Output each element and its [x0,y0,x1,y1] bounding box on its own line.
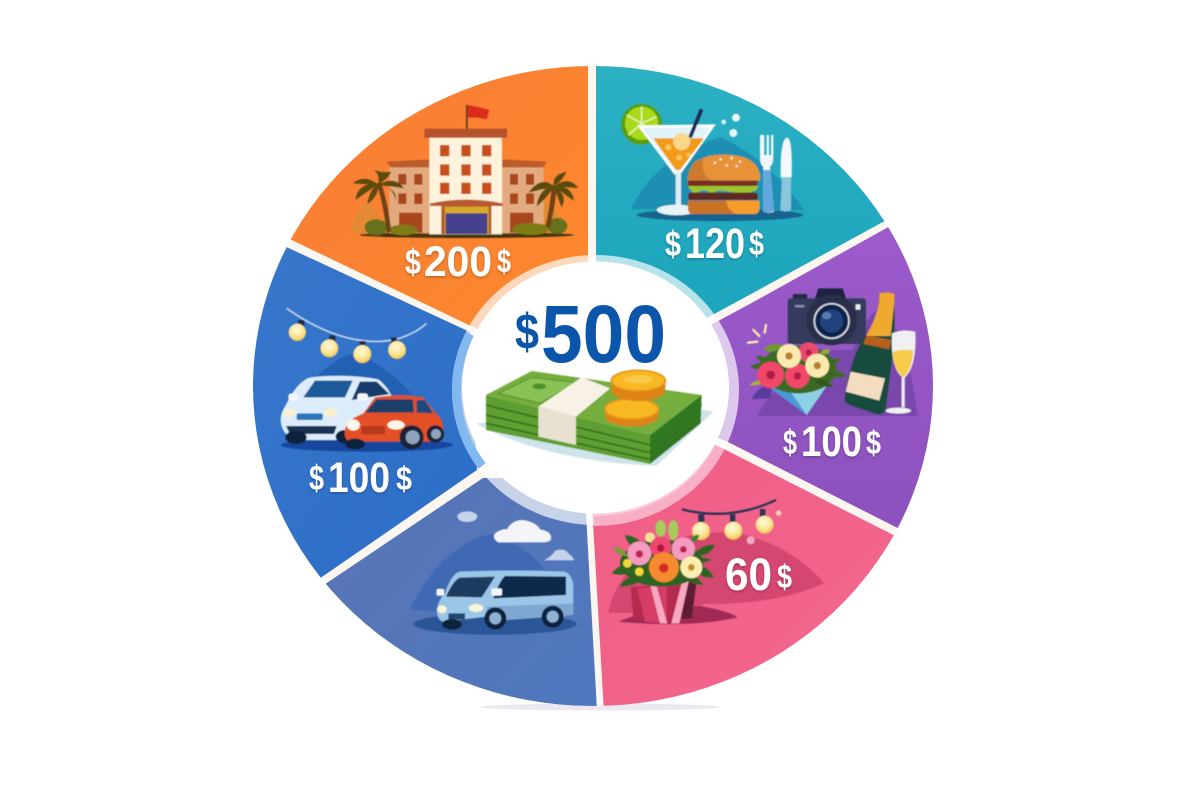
slice: flowers pink [592,444,894,706]
amount: food and drink: $ [665,225,681,264]
panel: hotel [351,105,578,286]
wheel ground shadow [480,704,720,710]
amount: food and drink: 120 [685,220,745,268]
amount: photo, flowers and champagne: $ [783,424,797,462]
light ring around centre [452,255,739,525]
amount: hotel: $ [497,243,511,279]
pie slices [253,66,933,706]
wheel base [253,66,933,706]
icon: money stack with coins [476,370,713,466]
panel: cars and lights [281,308,453,502]
amount: cars: $ [309,459,324,498]
total amount: 500 [541,289,666,380]
slice: food teal [596,66,884,318]
amount: photo, flowers and champagne: 100 [801,418,862,466]
centre total and money [476,289,713,466]
slice: hotel orange [290,66,588,329]
panel: food and drink [621,104,804,268]
amount: cars: 100 [328,454,390,502]
panel: shuttle van [410,511,577,635]
amount: hotel: $ [405,243,421,282]
amount: photo, flowers and champagne: $ [866,424,881,461]
panel: flowers and lights [608,500,824,624]
pink ring segment [594,447,720,521]
amount: cars: $ [396,460,412,497]
icon: shuttle van and clouds [410,511,577,635]
slice: photo purple [711,227,933,528]
amount: hotel: 200 [424,238,492,286]
icon: two cars and string lights [281,308,453,452]
icon: hotel [351,105,578,238]
icon: camera, bouquet and champagne [748,288,920,416]
panel: photo, flowers and champagne [748,288,920,466]
slice: cars blue [253,247,477,578]
icon: cocktail, burger and cutlery [621,104,804,221]
amount: flowers and lights: 60 [725,549,772,600]
amount: food and drink: $ [749,225,764,262]
slice: shuttle slate [326,478,597,706]
blue ring segment [456,334,482,466]
centre disc [462,262,729,514]
total amount: $ [515,304,539,360]
amount: flowers and lights: $ [777,558,792,595]
icon: flower box and string lights [608,500,824,624]
